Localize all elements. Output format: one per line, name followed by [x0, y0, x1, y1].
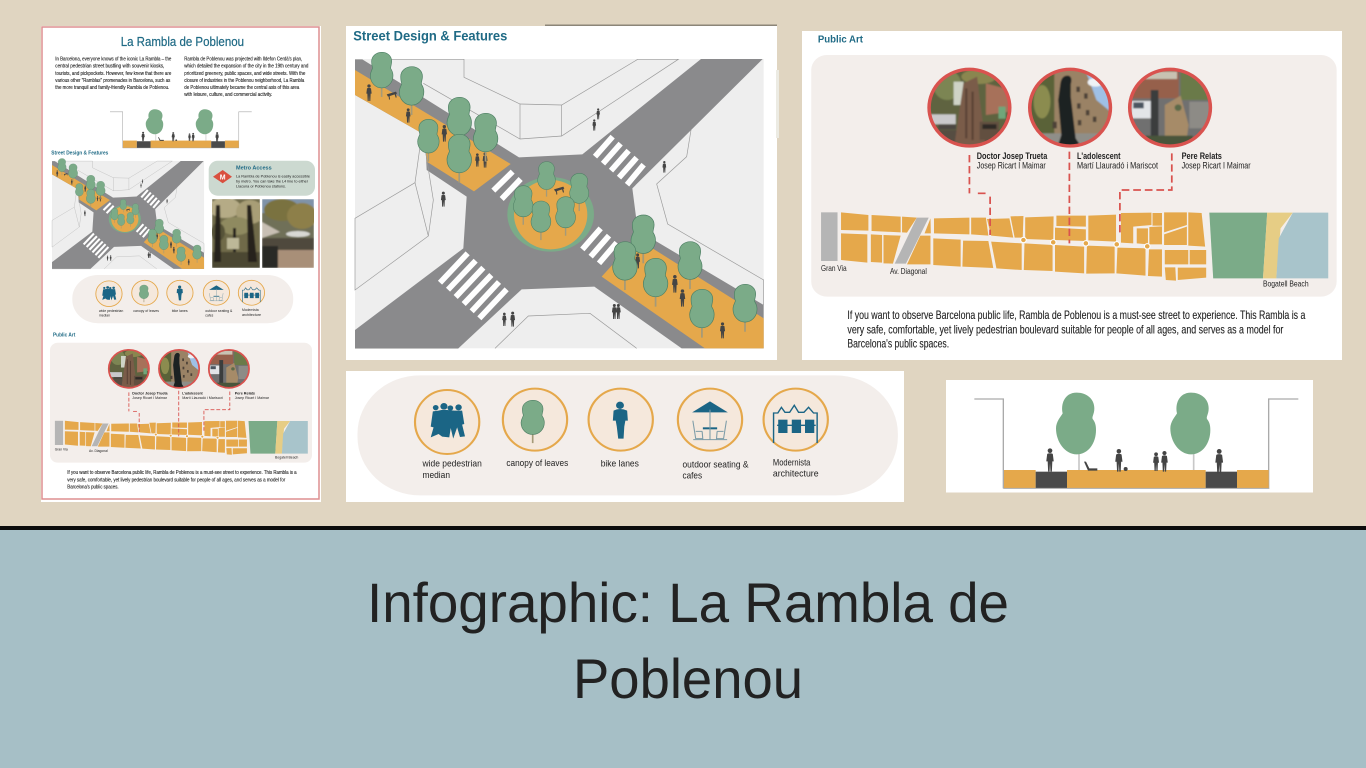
poster closing paragraph: If you want to observe Barcelona public life, Rambla de Poblenou is a must-see street to experience. This Rambla is a: [67, 470, 297, 476]
heading: public art: Public Art: [818, 35, 864, 46]
caption: Modernista architecture: architecture: [773, 469, 819, 480]
poster artwork labels: Bogatell Beach: [275, 455, 298, 459]
poster intro right: closure of industries in the Poblenou neighborhood, La Rambla: [184, 78, 304, 84]
artwork label: Pere Relats: Josep Ricart I Maimar: [1182, 160, 1251, 170]
artwork label: L'adolescent: L'adolescent: [1077, 151, 1121, 161]
poster feature captions: architecture: [242, 313, 261, 317]
poster metro access callout: La Rambla de Poblenou is easily accessible: [236, 174, 310, 178]
poster intro left: In Barcelona, everyone knows of the iconic La Rambla – the: [55, 57, 171, 63]
artwork label: Doctor Josep Trueta: Josep Ricart I Maimar: [977, 160, 1046, 170]
poster intro left: tourists, and pickpockets. However, few knew that there are: [55, 71, 171, 77]
poster public art map: [50, 343, 312, 463]
caption: wide pedestrian median: median: [422, 470, 450, 481]
caption: outdoor seating and cafes: cafes: [682, 471, 702, 482]
poster artwork labels: [55, 391, 298, 459]
poster street section: [110, 109, 252, 148]
poster metro access callout: M: [220, 174, 226, 181]
poster title: La Rambla de Poblenou: [121, 35, 244, 49]
poster features pill: [72, 275, 293, 323]
title: Infographic: La Rambla de: [367, 571, 1009, 634]
closing paragraph: Barcelona's public spaces.: [847, 336, 949, 350]
panel: street cross-section: [946, 380, 1313, 492]
poster feature captions: median: [99, 313, 110, 317]
poster artwork labels: Av. Diagonal: [89, 449, 108, 453]
panel: street design and features: [346, 25, 779, 360]
poster intro right: Rambla de Poblenou was projected with Ildefon Cerdà's plan,: [184, 57, 302, 63]
artwork label: L'adolescent: [1077, 151, 1158, 170]
poster street diagram: [52, 158, 204, 269]
panel: street features icons: [346, 371, 904, 502]
poster metro access callout: [209, 161, 315, 196]
artwork label: Pere Relats: [1182, 151, 1251, 170]
poster artwork labels: Josep Ricart I Maimar: [235, 396, 270, 400]
caption: wide pedestrian median: [422, 458, 482, 481]
poster feature captions: cafes: [205, 314, 213, 318]
title: [367, 571, 1009, 710]
poster intro right: de Poblenou ultimately became the central axis of this area: [184, 85, 299, 91]
street intersection diagram: [355, 52, 764, 348]
artwork label: Doctor Josep Trueta: [977, 151, 1048, 170]
poster intro right: which detailed the expansion of the city in the 19th century and: [184, 64, 308, 70]
poster feature captions: canopy of leaves: [133, 309, 159, 313]
map label: Bogatell Beach: Bogatell Beach: [1263, 279, 1309, 289]
poster feature captions: Modernista: [242, 308, 259, 312]
caption: Modernista architecture: Modernista: [773, 457, 811, 468]
poster intro right: prioritized greenery, public spaces, and wide streets. With the: [184, 71, 305, 77]
poster artwork labels: Josep Ricart I Maimar: [132, 396, 168, 400]
caption: bike lanes: bike lanes: [601, 459, 639, 470]
caption: outdoor seating and cafes: [682, 459, 749, 482]
poster photo: tree-lined promenade: [212, 199, 260, 268]
closing paragraph: [847, 308, 1306, 350]
poster feature captions: bike lanes: [172, 309, 188, 313]
poster heading: public art: Public Art: [53, 332, 75, 338]
poster intro right: [184, 57, 308, 98]
poster intro left: [55, 57, 171, 91]
poster closing paragraph: very safe, comfortable, yet lively pedestrian boulevard suitable for people of all ages, and serves as a model for: [67, 477, 286, 483]
caption: Modernista architecture: [773, 457, 819, 480]
map label: Av. Diagonal: Av. Diagonal: [890, 266, 927, 276]
artwork label: Pere Relats: Pere Relats: [1182, 151, 1222, 161]
poster artwork labels: Gran Via: [55, 447, 68, 451]
poster intro left: the more tranquil and family-friendly Rambla de Poblenou.: [55, 85, 169, 91]
poster intro left: various other "Ramblas" promenades in Barcelona, such as: [55, 78, 171, 84]
poster closing paragraph: Barcelona's public spaces.: [67, 484, 119, 490]
title band: [0, 530, 1366, 768]
caption: canopy of leaves: canopy of leaves: [506, 458, 568, 469]
panel: public art: [802, 31, 1342, 360]
poster intro right: with leisure, culture, and commercial activity.: [184, 92, 272, 98]
poster feature captions: wide pedestrian: [99, 309, 123, 313]
poster heading: street design: Street Design & Features: [51, 150, 108, 156]
poster photo: outdoor cafe: [262, 199, 317, 268]
artwork label: L'adolescent: Martí Llauradó i Mariscot: [1077, 160, 1158, 170]
cross-section drawing: [974, 393, 1298, 488]
poster artwork labels: L'adolescent: [182, 391, 203, 395]
poster artwork labels: Doctor Josep Trueta: [132, 391, 168, 395]
panel: full poster: [41, 26, 321, 502]
poster feature captions: [99, 308, 261, 318]
poster feature captions: outdoor seating &: [205, 309, 233, 313]
title: Poblenou: [573, 647, 803, 710]
poster metro access callout: Metro Access: [236, 166, 272, 172]
poster artwork labels: Martí Llauradó i Mariscot: [182, 396, 224, 400]
map label: Gran Via: Gran Via: [821, 263, 847, 273]
caption: wide pedestrian median: wide pedestrian: [422, 458, 482, 469]
public art map with statue photos: [811, 55, 1337, 297]
caption: outdoor seating and cafes: outdoor seating &: [682, 459, 749, 470]
poster metro access callout: by metro. You can take the L4 line to either: [236, 179, 309, 183]
artwork label: Doctor Josep Trueta: Doctor Josep Trueta: [977, 151, 1048, 161]
poster closing paragraph: [67, 470, 297, 490]
features pill with icons: [357, 375, 898, 495]
divider bar: [0, 526, 1366, 530]
heading: street design: Street Design & Features: [353, 28, 507, 44]
poster artwork labels: Pere Relats: [235, 391, 255, 395]
poster metro access callout: Llacuna or Poblenou stations.: [236, 185, 286, 189]
poster intro left: central pedestrian street bustling with souvenir kiosks,: [55, 64, 164, 70]
icon: metro diamond: [213, 170, 232, 183]
